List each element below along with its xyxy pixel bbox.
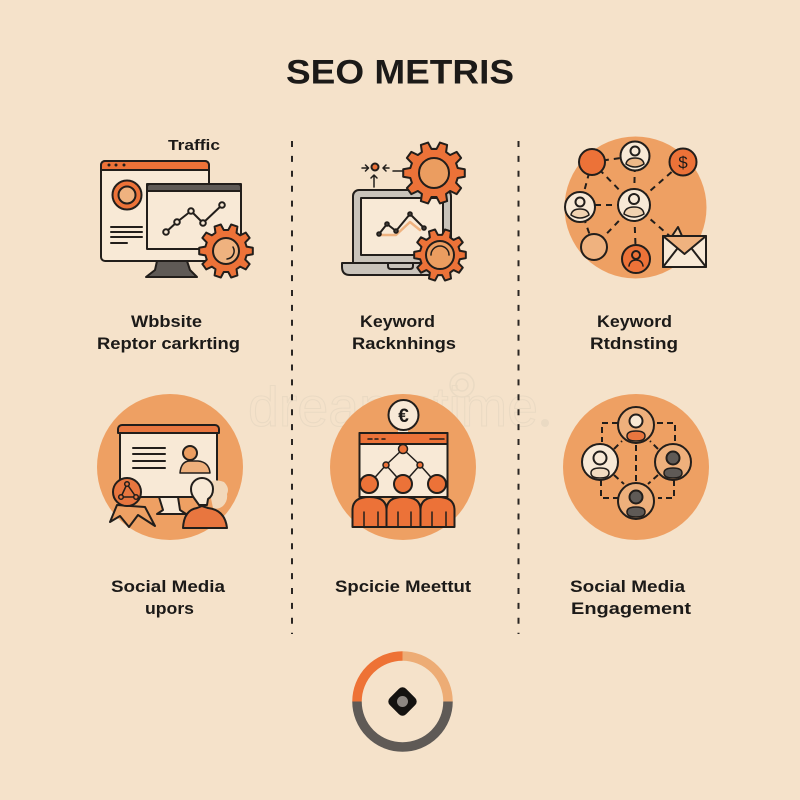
label: keyword rankings: Racknhings	[352, 335, 456, 353]
icon: keyword rankings laptop	[342, 143, 466, 281]
label: spcicie meettut: Spcicie Meettut	[335, 578, 472, 596]
label: keyword rankings	[352, 313, 456, 353]
dollar sign: $	[678, 153, 688, 172]
icon: keyword network	[564, 136, 706, 278]
label: website report: Reptor carkrting	[97, 335, 240, 353]
label: social media upors	[111, 578, 226, 618]
icon: hierarchy meetup	[330, 394, 476, 540]
label: keyword rtdnsting: Rtdnsting	[590, 335, 678, 353]
watermark: dreamstime	[248, 375, 538, 438]
title: SEO METRIS	[286, 54, 514, 92]
label: website report	[97, 313, 240, 353]
label: social media engagement	[570, 578, 692, 618]
label: website report: Wbbsite	[131, 313, 202, 331]
icon: social media engagement	[563, 394, 709, 540]
label: keyword rtdnsting	[590, 313, 678, 353]
donut ring with diamond	[357, 656, 448, 747]
icon: website traffic	[101, 161, 253, 278]
euro sign: €	[398, 406, 409, 427]
label: social media engagement: Engagement	[571, 600, 692, 618]
column dividers	[292, 141, 518, 634]
label: keyword rankings: Keyword	[360, 313, 435, 331]
icon: social media presentation	[97, 394, 243, 540]
label: traffic: Traffic	[168, 137, 220, 154]
label: social media upors: upors	[145, 600, 194, 618]
label: social media engagement: Social Media	[570, 578, 686, 596]
label: social media upors: Social Media	[111, 578, 226, 596]
label: keyword rtdnsting: Keyword	[597, 313, 672, 331]
